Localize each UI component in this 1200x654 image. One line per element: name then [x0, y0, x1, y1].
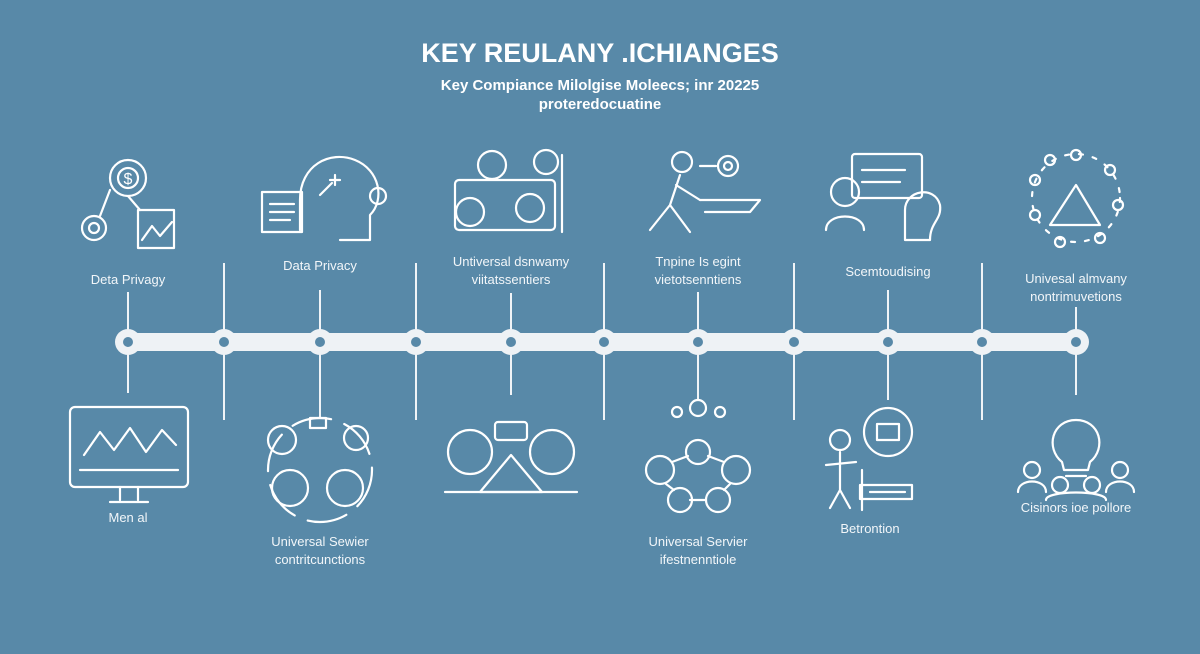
- icon: lightbulb with people: [1018, 420, 1134, 500]
- label: universal 1: Untiversal dsnwamy: [453, 254, 570, 269]
- icon: monitor with chart: [70, 407, 188, 502]
- icon: walking person with arrow: [650, 152, 760, 232]
- timeline bar: [115, 329, 1089, 355]
- label: trpine: vietotsenntiens: [655, 272, 742, 287]
- icon: person with board: [826, 154, 940, 240]
- icon: gears and chart: $: [124, 171, 133, 188]
- icon: people circle: [268, 418, 372, 522]
- title: KEY REULANY .ICHIANGES: [421, 38, 779, 68]
- subtitle: [441, 77, 759, 113]
- label: betrontion: Betrontion: [840, 521, 900, 536]
- icon: person with sign: [826, 408, 912, 510]
- label: universal service 1: contritcunctions: [275, 552, 366, 567]
- label: trpine: [655, 254, 742, 287]
- label: universal 2: [1025, 271, 1127, 304]
- label: universal 1: [453, 254, 570, 287]
- label: data privacy 1: Deta Privagy: [91, 272, 166, 287]
- icon: two faces with triangle: [445, 422, 577, 492]
- label: data privacy 2: Data Privacy: [283, 258, 357, 273]
- label: universal service 2: ifestnenntiole: [660, 552, 736, 567]
- label: universal service 2: Universal Servier: [649, 534, 748, 549]
- label: universal service 1: [271, 534, 369, 567]
- subtitle: Key Compiance Milolgise Moleecs; inr 20225: [441, 77, 759, 94]
- icon: gears and chart: [82, 160, 174, 248]
- icon: head with document: [262, 157, 386, 240]
- label: universal 1: viitatssentiers: [472, 272, 551, 287]
- label: universal service 2: [649, 534, 748, 567]
- icon: people network: [646, 400, 750, 512]
- label: trpine: Tnpine Is egint: [655, 254, 741, 269]
- connector lines: [128, 263, 1076, 420]
- label: men al: Men al: [108, 510, 148, 525]
- label: universal 2: nontrimuvetions: [1030, 289, 1122, 304]
- icon: circle of nodes with mountain: [1030, 150, 1123, 247]
- label: universal 2: Univesal almvany: [1025, 271, 1127, 286]
- label: scemtoudising: Scemtoudising: [845, 264, 931, 279]
- label: universal service 1: Universal Sewier: [271, 534, 369, 549]
- label: cisinors: Cisinors ioe pollore: [1021, 500, 1131, 515]
- icon: network of circles: [455, 150, 562, 232]
- subtitle: proteredocuatine: [539, 96, 661, 113]
